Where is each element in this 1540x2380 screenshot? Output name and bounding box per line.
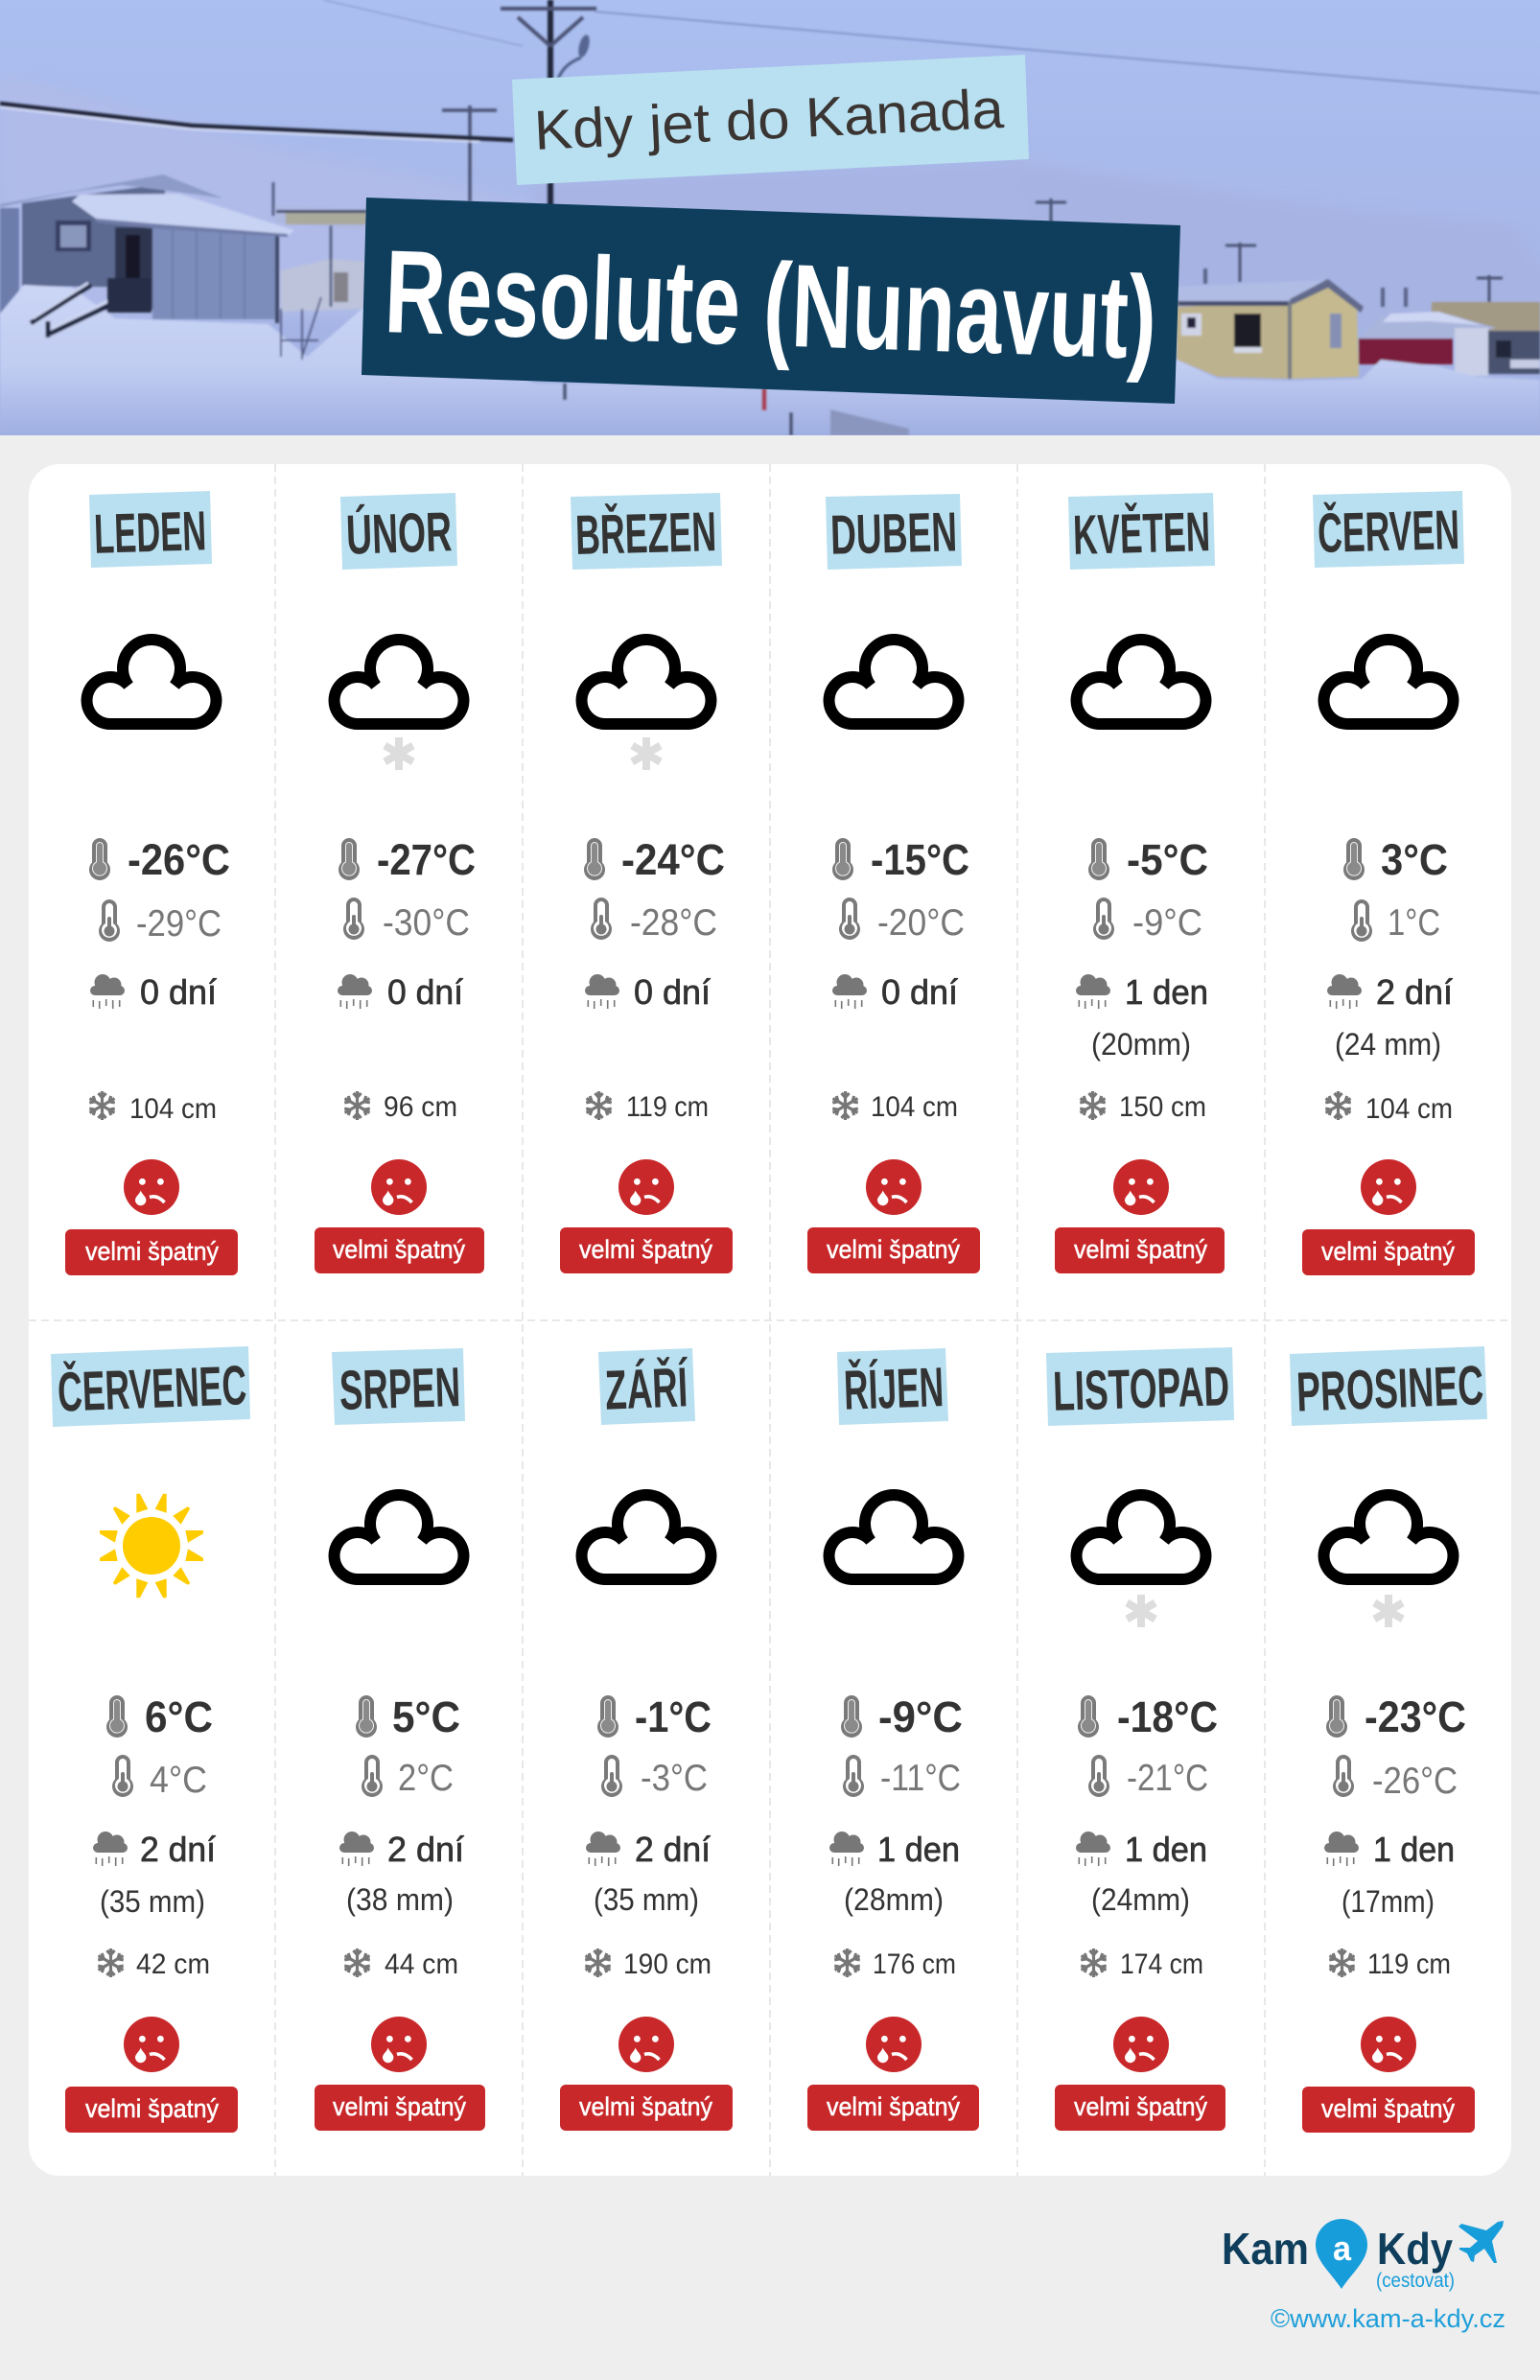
high temperature: [597, 1692, 712, 1741]
low temperature: [112, 1755, 207, 1801]
panel: LISTOPAD: [1046, 1347, 1234, 2131]
rain days: [1324, 1830, 1455, 1869]
rating badge: velmi špatný: [85, 1237, 219, 1266]
rain days: 2 dní: [140, 1830, 216, 1869]
month heading: [826, 494, 962, 570]
rating badge: velmi špatný: [1074, 2092, 1207, 2121]
panel: ČERVENEC: [51, 1346, 250, 2133]
rating badge: velmi špatný: [1321, 1237, 1455, 1266]
icon: cloud: [582, 1495, 711, 1579]
panel: LEDEN: [65, 491, 238, 1275]
month heading: [332, 1348, 465, 1425]
rain days: 0 dní: [140, 972, 217, 1012]
month heading: ÚNOR: [345, 501, 453, 567]
rating badge: [315, 1227, 484, 1273]
icon: sad face: [1361, 1159, 1416, 1215]
panel: PROSINEC: [1290, 1346, 1487, 2133]
low temperature: -9°C: [1132, 902, 1202, 944]
high temperature: [1078, 1692, 1218, 1741]
panel: ÚNOR: [315, 493, 484, 1273]
high temperature: -23°C: [1365, 1692, 1466, 1741]
low temperature: [362, 1755, 454, 1799]
panel: ČERVEN: [1302, 491, 1475, 1275]
panel: ZÁŘÍ: [560, 1348, 733, 2131]
high temperature: -1°C: [635, 1692, 712, 1741]
rain days: [585, 972, 711, 1012]
low temperature: -11°C: [880, 1758, 961, 1799]
icon: cloud: [829, 640, 958, 724]
snow depth: [1079, 1091, 1206, 1123]
snow depth: 104 cm: [129, 1093, 217, 1125]
icon: sad face: [371, 1159, 427, 1215]
rain days: [1327, 972, 1453, 1012]
icon: map pin: a: [1333, 2228, 1352, 2268]
snow depth: [1328, 1948, 1451, 1980]
snow depth: [833, 1948, 956, 1980]
snow depth: 119 cm: [1367, 1948, 1451, 1980]
month heading: DUBEN: [829, 501, 958, 567]
month heading: ZÁŘÍ: [604, 1356, 690, 1422]
rating badge: [560, 2085, 733, 2131]
rating badge: velmi špatný: [1321, 2094, 1455, 2123]
panel: SRPEN: [315, 1348, 485, 2131]
low temperature: [1088, 1755, 1208, 1799]
low temperature: [1351, 899, 1440, 944]
panel: ŘÍJEN: [807, 1348, 979, 2131]
month heading: [837, 1348, 948, 1425]
icon: cloud with snow: [1324, 1495, 1453, 1627]
low temperature: -30°C: [383, 902, 470, 944]
rain days: 0 dní: [387, 972, 463, 1012]
month heading: [1068, 493, 1215, 570]
high temperature: 5°C: [392, 1692, 460, 1741]
month heading: ŘÍJEN: [843, 1356, 945, 1422]
snow depth: 104 cm: [1365, 1093, 1453, 1125]
snow depth: 104 cm: [871, 1091, 958, 1123]
high temperature: -27°C: [377, 835, 476, 884]
high temperature: -26°C: [128, 835, 230, 884]
low temperature: 1°C: [1388, 902, 1440, 944]
high temperature: [832, 835, 969, 884]
low temperature: 2°C: [398, 1758, 454, 1799]
month heading: ČERVENEC: [57, 1354, 247, 1424]
icon: sad face: [618, 1159, 674, 1215]
month heading: KVĚTEN: [1072, 501, 1211, 567]
snow depth: [88, 1091, 217, 1125]
left house: [0, 208, 19, 314]
high temperature: -5°C: [1127, 835, 1208, 884]
month heading: [571, 493, 722, 570]
rainfall amount: (17mm): [1342, 1884, 1435, 1919]
month heading: [1313, 491, 1464, 568]
logo: Kam a Kdy: Kam: [1222, 2224, 1309, 2274]
high temperature: [584, 835, 725, 884]
low temperature: -28°C: [630, 902, 717, 944]
icon: map pin: [1316, 2219, 1367, 2289]
logo: Kam a Kdy: (cestovat): [1376, 2270, 1455, 2292]
snow depth: 96 cm: [384, 1091, 457, 1123]
icon: cloud: [829, 1495, 958, 1579]
low temperature: [601, 1755, 708, 1799]
rating badge: velmi špatný: [85, 2094, 219, 2123]
high temperature: [338, 835, 476, 884]
title panel: Resolute (Nunavut): [362, 198, 1180, 404]
rain days: [338, 972, 463, 1012]
right house: [1432, 302, 1540, 336]
snow depth: 176 cm: [873, 1948, 956, 1980]
rainfall amount: (35 mm): [100, 1884, 205, 1919]
logo: Kam a Kdy: Kdy: [1377, 2224, 1453, 2274]
rating badge: velmi špatný: [827, 1235, 960, 1264]
snow depth: [343, 1948, 458, 1980]
logo: Kam a Kdy: [1222, 2219, 1504, 2292]
title tag: Kdy jet do Kanada: [512, 55, 1029, 185]
rating badge: velmi špatný: [333, 1235, 465, 1264]
month heading: [51, 1346, 250, 1427]
low temperature: [839, 898, 965, 944]
title tag: Kdy jet do Kanada: Kdy jet do Kanada: [533, 78, 1006, 162]
rating badge: [1302, 1229, 1475, 1275]
high temperature: [1343, 835, 1448, 884]
rain days: 1 den: [1125, 1830, 1207, 1869]
low temperature: [99, 899, 222, 945]
month heading: [89, 491, 212, 568]
month heading: [1046, 1347, 1234, 1426]
high temperature: -18°C: [1117, 1692, 1218, 1741]
snow depth: [831, 1091, 958, 1123]
high temperature: -15°C: [871, 835, 969, 884]
rain days: [93, 1830, 216, 1869]
low temperature: [1333, 1755, 1458, 1802]
icon: sad face: [124, 2017, 179, 2072]
icon: cloud with snow: [582, 640, 711, 770]
low temperature: [1093, 898, 1202, 944]
snow depth: 190 cm: [623, 1948, 712, 1980]
low temperature: -21°C: [1127, 1758, 1208, 1799]
panel: DUBEN: [807, 494, 980, 1273]
snow depth: [343, 1091, 457, 1123]
high temperature: [106, 1692, 213, 1741]
snow depth: 42 cm: [136, 1948, 210, 1980]
rating badge: velmi špatný: [333, 2092, 466, 2121]
month heading: [598, 1348, 695, 1425]
icon: cloud: [1324, 640, 1453, 724]
rain days: 1 den: [1373, 1830, 1455, 1869]
icon: sun: [100, 1494, 203, 1598]
high temperature: [1326, 1692, 1466, 1741]
rain days: 0 dní: [881, 972, 958, 1012]
rating badge: [1055, 2085, 1225, 2131]
month heading: [340, 493, 457, 570]
rain days: 2 dní: [1376, 972, 1453, 1012]
icon: plane: [1458, 2221, 1504, 2263]
high temperature: [841, 1692, 963, 1741]
month heading: BŘEZEN: [574, 501, 717, 567]
icon: cloud: [87, 640, 216, 724]
main card: [29, 464, 1511, 2176]
rating badge: velmi špatný: [579, 1235, 712, 1264]
low temperature: [343, 898, 470, 944]
high temperature: [1088, 835, 1208, 884]
rainfall amount: (24mm): [1091, 1882, 1190, 1917]
low temperature: -3°C: [641, 1758, 708, 1799]
rain days: [586, 1830, 711, 1869]
rainfall amount: (20mm): [1091, 1027, 1191, 1062]
snow depth: 150 cm: [1119, 1091, 1206, 1123]
icon: sad face: [866, 2017, 922, 2072]
icon: sad face: [371, 2017, 427, 2072]
high temperature: [89, 835, 230, 884]
low temperature: [843, 1755, 961, 1799]
icon: cloud with snow: [1077, 1495, 1205, 1627]
rating badge: [65, 2087, 238, 2133]
rain days: 1 den: [1125, 972, 1208, 1012]
background buildings left: [275, 206, 366, 230]
header photo: snowy Arctic village: [0, 0, 1540, 435]
high temperature: -9°C: [878, 1692, 963, 1741]
rating badge: [1055, 1227, 1225, 1273]
rating badge: velmi špatný: [579, 2092, 712, 2121]
rain days: [1076, 972, 1208, 1012]
icon: cloud: [335, 1495, 463, 1579]
rain days: 2 dní: [387, 1830, 464, 1869]
icon: sad face: [1361, 2017, 1416, 2072]
high temperature: 6°C: [145, 1692, 213, 1741]
rain days: [90, 972, 217, 1012]
rating badge: velmi špatný: [1074, 1235, 1207, 1264]
rating badge: [65, 1229, 238, 1275]
rainfall amount: (35 mm): [594, 1882, 699, 1917]
panel: KVĚTEN: [1055, 493, 1225, 1273]
icon: sad face: [618, 2017, 674, 2072]
rain days: 2 dní: [635, 1830, 711, 1869]
low temperature: -29°C: [136, 903, 222, 945]
rating badge: [1302, 2087, 1475, 2133]
rain days: [832, 972, 958, 1012]
snow depth: [1324, 1091, 1453, 1125]
snow depth: 119 cm: [626, 1091, 709, 1123]
icon: sad face: [866, 1159, 922, 1215]
high temperature: -24°C: [621, 835, 725, 884]
rating badge: [560, 1227, 733, 1273]
icon: cloud with snow: [335, 640, 463, 770]
month heading: SRPEN: [338, 1356, 461, 1422]
rain days: [339, 1830, 464, 1869]
rainfall amount: (24 mm): [1335, 1027, 1441, 1062]
month heading: LISTOPAD: [1052, 1355, 1230, 1423]
month heading: LEDEN: [93, 500, 207, 566]
snow depth: 44 cm: [385, 1948, 458, 1980]
panel: BŘEZEN: [560, 493, 733, 1273]
rain days: [1076, 1830, 1207, 1869]
rating badge: velmi špatný: [827, 2092, 960, 2121]
snow depth: [1080, 1948, 1203, 1980]
snow depth: [584, 1948, 712, 1980]
low temperature: [591, 898, 717, 944]
website credit: ©www.kam-a-kdy.cz: [1271, 2304, 1505, 2333]
icon: cloud: [1077, 640, 1205, 724]
low temperature: -26°C: [1372, 1761, 1458, 1802]
rain days: 0 dní: [634, 972, 711, 1012]
rating badge: [807, 2085, 979, 2131]
rainfall amount: (38 mm): [346, 1882, 454, 1917]
icon: sad face: [1113, 1159, 1169, 1215]
high temperature: [356, 1692, 460, 1741]
snow depth: [585, 1091, 709, 1123]
snow depth: 174 cm: [1120, 1948, 1203, 1980]
snow depth: [97, 1948, 210, 1980]
rain days: 1 den: [877, 1830, 960, 1869]
low temperature: 4°C: [150, 1760, 207, 1801]
rain days: [829, 1830, 960, 1869]
title panel: Resolute (Nunavut): Resolute (Nunavut): [383, 226, 1158, 385]
snow ground: [0, 285, 1540, 435]
high temperature: 3°C: [1381, 835, 1448, 884]
low temperature: -20°C: [877, 902, 965, 944]
rating badge: [807, 1227, 980, 1273]
icon: sad face: [1113, 2017, 1169, 2072]
rating badge: [315, 2085, 485, 2131]
icon: sad face: [124, 1159, 179, 1215]
rainfall amount: (28mm): [844, 1882, 944, 1917]
